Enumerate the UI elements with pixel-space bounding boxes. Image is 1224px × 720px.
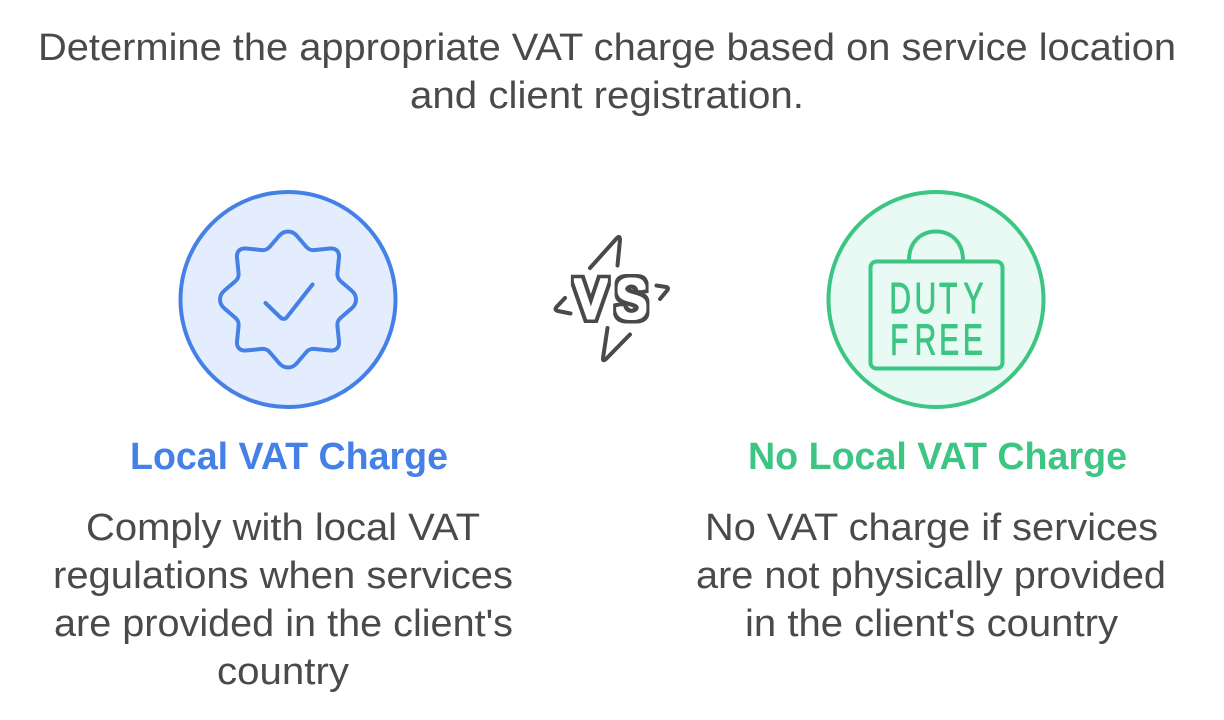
icon: versus lightning: VS xyxy=(575,268,647,331)
title xyxy=(38,27,1176,117)
icon: duty free bag in green circle xyxy=(828,192,1044,407)
panel: local VAT charge xyxy=(53,192,513,693)
text block: local VAT description: are provided in the client's xyxy=(54,603,513,645)
panel: no local VAT charge xyxy=(696,192,1166,645)
heading: local VAT charge: Local VAT Charge xyxy=(130,436,448,478)
title: and client registration. xyxy=(410,75,804,117)
text block: local VAT description: Comply with local VAT xyxy=(86,507,480,549)
text block: local VAT description: regulations when services xyxy=(53,555,513,597)
text block: local VAT description: country xyxy=(217,651,349,693)
icon: verified badge in blue circle xyxy=(180,192,396,407)
text block: local VAT description xyxy=(53,507,513,693)
heading: no local VAT charge: No Local VAT Charge xyxy=(748,436,1127,478)
icon: duty free bag in green circle: DUTY xyxy=(889,273,984,322)
text block: no local VAT description: in the client's country xyxy=(745,603,1118,645)
text block: no local VAT description: No VAT charge if services xyxy=(705,507,1158,549)
text block: no local VAT description: are not physically provided xyxy=(696,555,1166,597)
icon: duty free bag in green circle: FREE xyxy=(890,315,983,364)
text block: no local VAT description xyxy=(696,507,1166,645)
title: Determine the appropriate VAT charge based on service location xyxy=(38,27,1176,69)
icon: versus lightning xyxy=(556,237,668,360)
